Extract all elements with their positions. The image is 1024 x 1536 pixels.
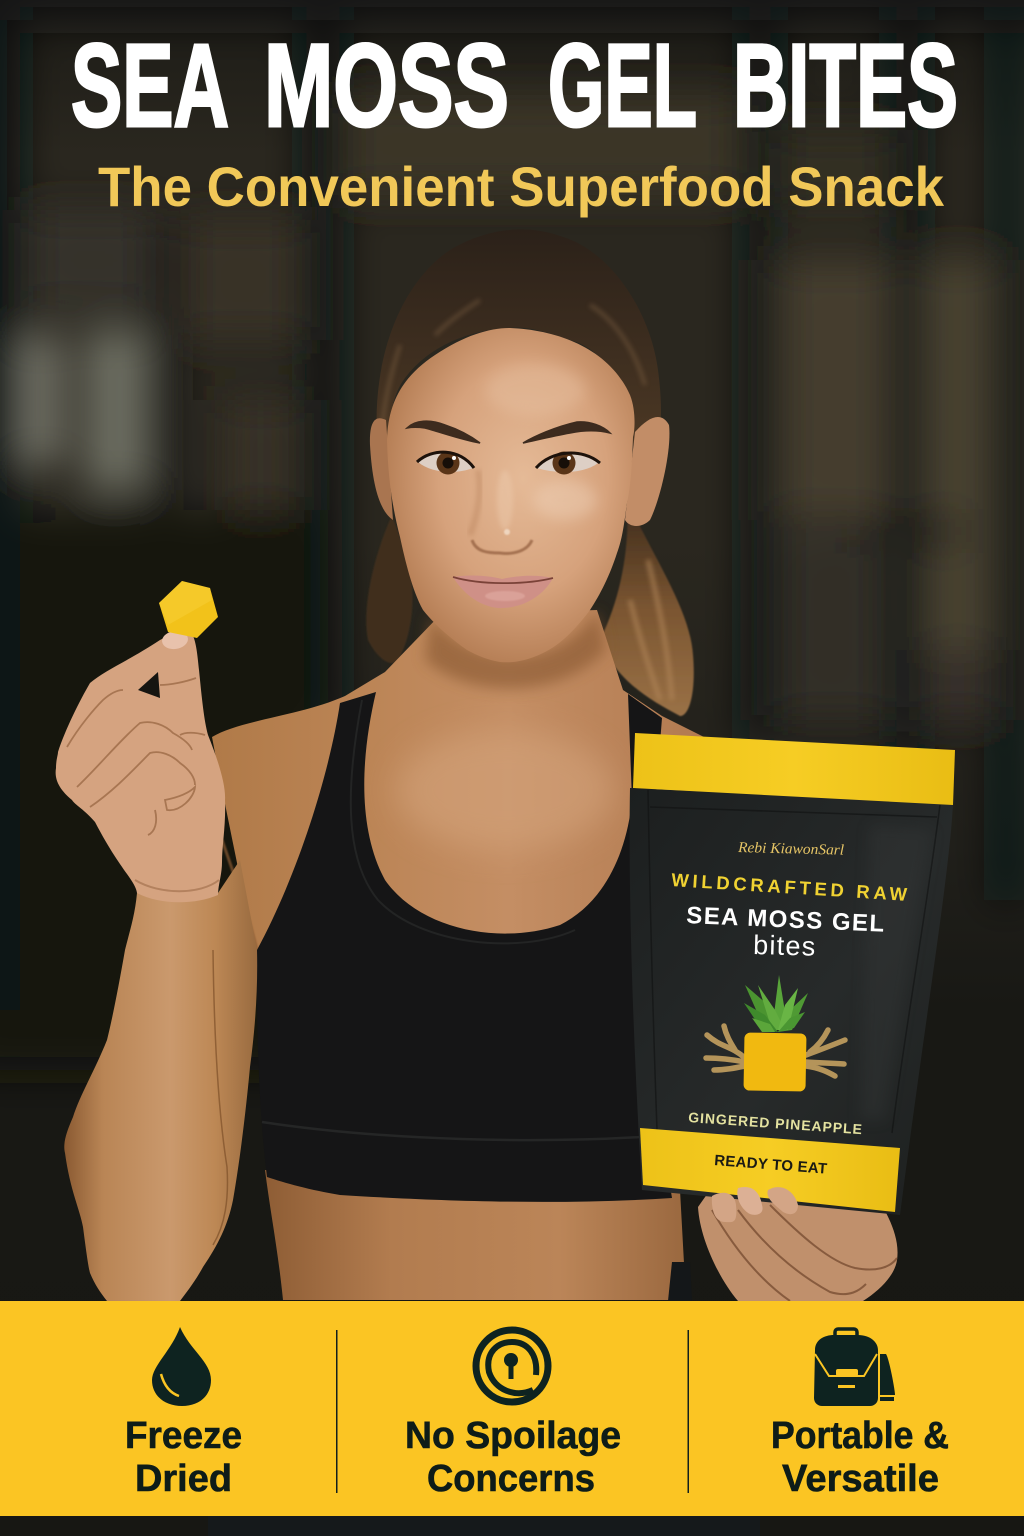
ginger roots — [706, 1026, 845, 1076]
ear left — [370, 418, 393, 520]
icon: keyhole maze — [476, 1330, 548, 1402]
brand script: Rebi KiawonSarl — [737, 840, 844, 859]
nose — [470, 470, 532, 553]
fingers over pouch — [712, 1187, 798, 1222]
feature: no spoilage concerns — [405, 1330, 621, 1500]
divider left — [336, 1330, 338, 1493]
top yellow seal — [633, 733, 955, 805]
feature: portable and versatile — [771, 1329, 949, 1500]
person holding a bite — [56, 229, 706, 1301]
yellow cube — [743, 1032, 807, 1092]
black sports bra — [257, 692, 672, 1202]
label: freeze dried — [125, 1415, 242, 1500]
sea moss gel: SEA MOSS GEL — [686, 902, 885, 938]
chest highlight — [395, 730, 615, 850]
title — [71, 20, 958, 152]
pineapple leaves — [744, 975, 808, 1032]
face — [387, 328, 635, 662]
pants strip below band — [208, 1516, 760, 1536]
cheek highlight — [533, 480, 597, 520]
left brow — [407, 421, 480, 443]
right eye — [536, 452, 600, 474]
label: no spoilage concerns: Concerns — [427, 1458, 595, 1500]
feature band — [0, 1301, 1024, 1516]
right brow — [523, 422, 610, 443]
ponytail and back hair — [366, 500, 694, 716]
icon: water drop — [152, 1327, 211, 1406]
icon: backpack — [814, 1329, 895, 1406]
forearm — [64, 860, 257, 1301]
pouch sheen — [860, 825, 932, 1120]
feature: freeze dried — [125, 1327, 242, 1500]
abdomen — [265, 1170, 686, 1300]
title: SEA — [71, 20, 229, 152]
forehead highlight — [485, 364, 585, 416]
gingered pineapple: GINGERED PINEAPPLE — [688, 1109, 862, 1137]
label: no spoilage concerns: No Spoilage — [405, 1415, 621, 1457]
bites: bites — [753, 930, 816, 962]
left eye — [417, 452, 474, 474]
ready to eat: READY TO EAT — [714, 1152, 828, 1178]
pouch body — [630, 788, 953, 1215]
ear right — [625, 417, 669, 526]
label: no spoilage concerns — [405, 1415, 621, 1500]
armpit crease — [222, 840, 257, 950]
title: GEL — [548, 20, 697, 152]
label: freeze dried: Freeze — [125, 1415, 242, 1457]
title: MOSS — [264, 20, 509, 152]
yellow gel bite — [159, 581, 218, 638]
wildcrafted raw: WILDCRAFTED RAW — [671, 869, 908, 905]
label: portable and versatile — [771, 1415, 949, 1500]
label: portable and versatile: Versatile — [782, 1458, 939, 1500]
lips — [453, 576, 553, 608]
hair highlights — [382, 300, 645, 430]
pants edge — [668, 1262, 692, 1301]
hand holding the pouch — [698, 1190, 898, 1301]
product pouch — [630, 733, 955, 1222]
hand — [56, 629, 225, 902]
torso and shoulders — [212, 610, 706, 1000]
neck shadow — [425, 610, 606, 689]
hair top — [376, 229, 661, 470]
divider right — [688, 1330, 689, 1493]
label: freeze dried: Dried — [135, 1458, 232, 1500]
bottom yellow band — [640, 1128, 900, 1212]
label: portable and versatile: Portable & — [771, 1415, 949, 1457]
pouch gussets — [648, 790, 940, 1133]
subtitle: The Convenient Superfood Snack — [98, 155, 945, 218]
